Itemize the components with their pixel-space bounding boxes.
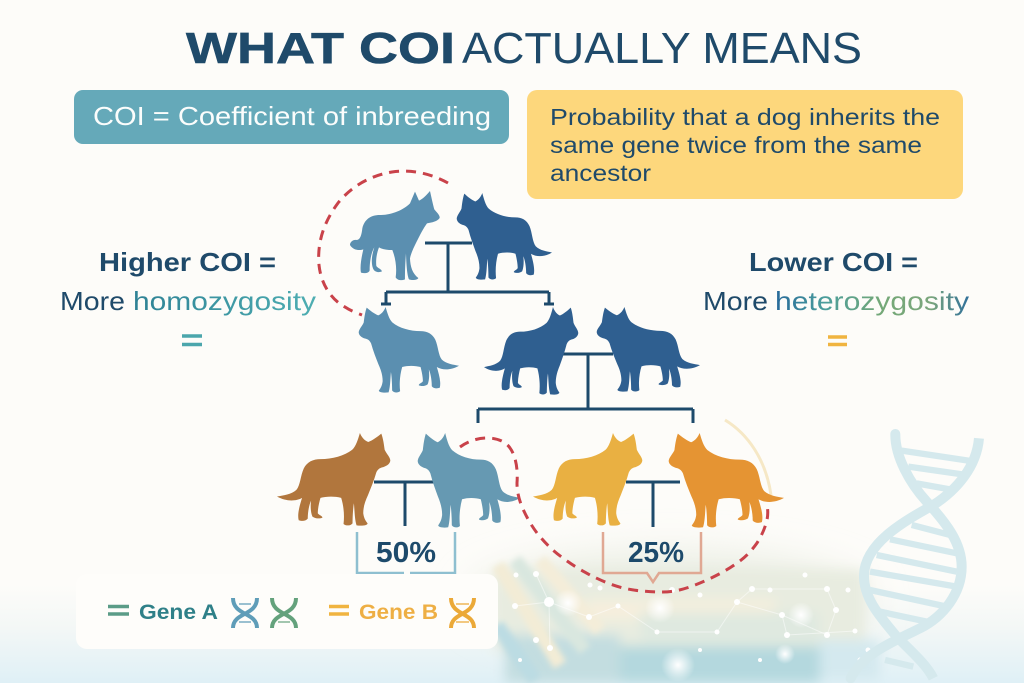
- gene B label: Gene B: [359, 600, 438, 624]
- icon: dna blue: [233, 598, 257, 628]
- dog: teal: [418, 433, 520, 528]
- definition box: probability: ancestor: [550, 160, 651, 186]
- right text: lower COI: Lower COI =: [749, 247, 918, 277]
- dog: middle right: [597, 307, 700, 392]
- gene B label: [329, 600, 438, 624]
- left text: higher COI: [60, 247, 316, 344]
- icon: dna green: [272, 598, 296, 628]
- definition box: COI: COI = Coefficient of inbreeding: [93, 101, 491, 131]
- dog: yellow: [533, 433, 642, 526]
- bracket: 25%: [603, 532, 701, 582]
- definition box: probability: Probability that a dog inherits the: [550, 104, 940, 130]
- pedigree connectors: [374, 243, 693, 527]
- inbreeding loop: upper dashed arc: [319, 171, 448, 315]
- bracket: 50%: [357, 532, 455, 573]
- right text: lower COI: [703, 247, 969, 344]
- title: ACTUALLY MEANS: [462, 24, 862, 73]
- inbreeding loop: lower dashed arc: [460, 438, 768, 592]
- dog: middle left offspring: [359, 307, 459, 393]
- left text: higher COI: homozygosity: [133, 286, 316, 316]
- definition box: probability: [527, 90, 963, 199]
- dog: brown: [277, 433, 390, 526]
- bracket: 25%: 25%: [628, 537, 684, 569]
- left text: higher COI: More: [60, 286, 125, 316]
- gene A label: [108, 600, 218, 624]
- definition box: COI: [74, 90, 509, 144]
- dog: top right ancestor: [457, 193, 552, 280]
- left text: higher COI: Higher COI =: [99, 247, 276, 277]
- dna helix: [851, 434, 979, 678]
- definition box: probability: same gene twice from the same: [550, 132, 922, 158]
- dog: orange: [669, 433, 784, 528]
- legend panel: [76, 574, 498, 649]
- title: [186, 24, 862, 73]
- right text: lower COI: More: [703, 286, 768, 316]
- gene A label: Gene A: [139, 600, 218, 624]
- icon: dna yellow: [451, 598, 474, 628]
- title: WHAT COI: [186, 24, 455, 73]
- dog: top left ancestor: [350, 191, 440, 280]
- bracket: 50%: 50%: [376, 537, 436, 569]
- faint yellow arc: [725, 420, 771, 495]
- dog: middle centre: [484, 307, 578, 395]
- right text: lower COI: heterozygosity: [775, 286, 969, 316]
